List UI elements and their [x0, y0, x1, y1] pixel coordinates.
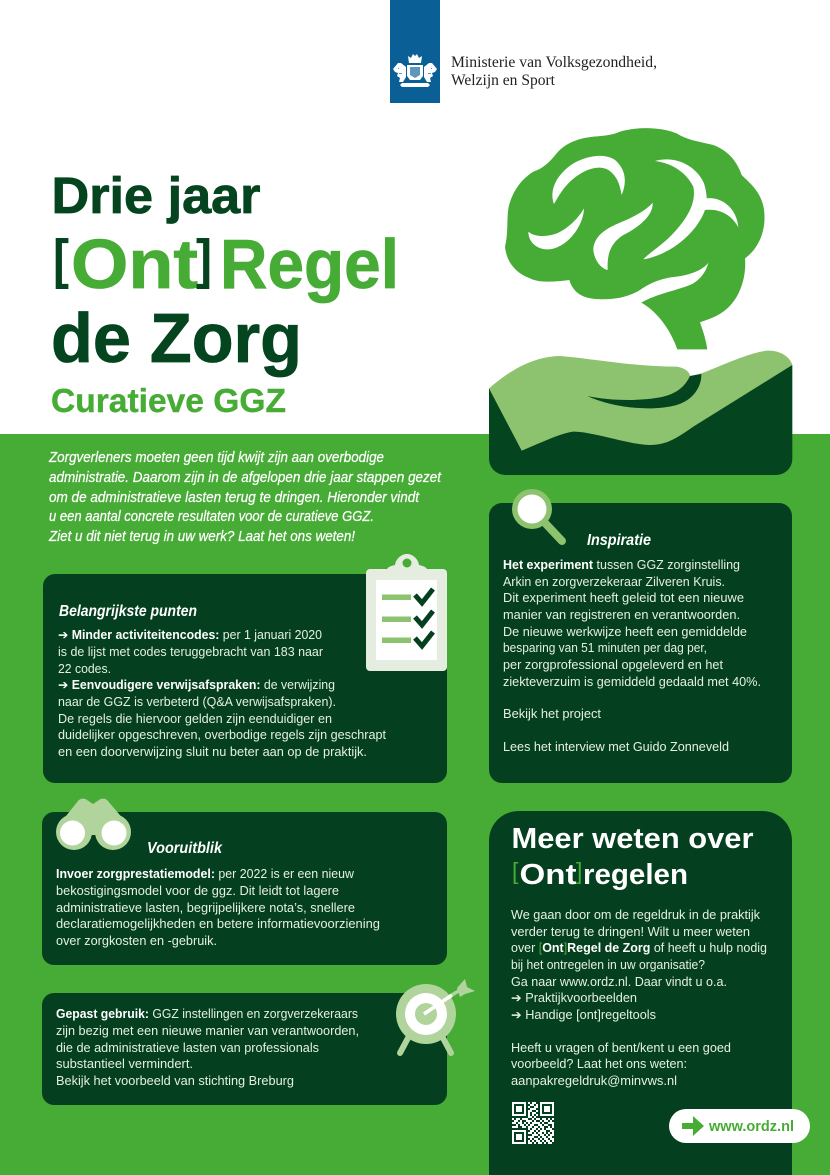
- body text: bekostigingsmodel voor de ggz. Dit leidt tot lagere: [56, 884, 339, 898]
- panel: vooruitblik: [42, 812, 447, 965]
- illustration: brain above a hand: [489, 128, 792, 475]
- heading: ]: [576, 858, 582, 884]
- url: www.ordz.nl: [708, 1118, 794, 1135]
- brain folds: [528, 156, 738, 270]
- panel background: [489, 811, 792, 1175]
- subtitle: Curatieve GGZ: [51, 382, 286, 419]
- body text: aanpakregeldruk@minvws.nl: [511, 1074, 677, 1088]
- panel background: [42, 812, 447, 965]
- body text: voorbeeld? Laat het ons weten:: [511, 1057, 687, 1071]
- hand base: [489, 365, 792, 475]
- intro text: u een aantal concrete resultaten voor de curatieve GGZ.: [49, 509, 374, 525]
- panel: belangrijkste punten: [43, 574, 447, 783]
- title line 2: [53, 225, 399, 303]
- ministry name line 2: Welzijn en Sport: [451, 72, 556, 89]
- body text: Bekijk het voorbeeld van stichting Breburg: [56, 1074, 294, 1088]
- panel: inspiratie: [489, 503, 792, 783]
- body text: Invoer zorgprestatiemodel: per 2022 is er een nieuw: [56, 867, 355, 881]
- website button: [669, 1109, 810, 1143]
- heading: Vooruitblik: [147, 840, 223, 857]
- body text: [503, 558, 761, 754]
- body text: declaratiemogelijkheden en betere informatievoorziening: [56, 917, 380, 931]
- body text: ➔ Handige [ont]regeltools: [511, 1008, 656, 1022]
- body text: over zorgkosten en -gebruik.: [56, 934, 217, 948]
- icon: target with dart: [396, 979, 475, 1053]
- intro text: Zorgverleners moeten geen tijd kwijt zijn aan overbodige: [48, 450, 384, 466]
- body text: zijn bezig met een nieuwe manier van verantwoorden,: [56, 1024, 359, 1038]
- heading: regelen: [583, 859, 688, 891]
- body text: is de lijst met codes teruggebracht van 183 naar: [58, 645, 323, 659]
- body text: Gepast gebruik: GGZ instellingen en zorgverzekeraars: [56, 1007, 358, 1021]
- heading: [: [512, 858, 519, 884]
- body text: administratieve lasten, begrijpelijkere nota’s, snellere: [56, 901, 355, 915]
- panel background: [43, 574, 447, 783]
- body text: duidelijker opgeschreven, overbodige regels zijn geschrapt: [58, 728, 386, 742]
- title line 2: Regel: [220, 225, 399, 303]
- title line 2: Ont: [71, 225, 198, 303]
- body text: ziekteverzuim is gemiddeld gedaald met 40%.: [503, 675, 761, 689]
- body text: ➔ Praktijkvoorbeelden: [511, 991, 637, 1005]
- body text: ➔ Eenvoudigere verwijsafspraken: de verwijzing: [58, 678, 335, 692]
- body text: De regels die hiervoor gelden zijn eenduidiger en: [58, 712, 332, 726]
- body text: De nieuwe werkwijze heeft een gemiddelde: [503, 625, 747, 639]
- body text: manier van registreren en verantwoorden.: [503, 608, 740, 622]
- heading: Meer weten over: [512, 823, 754, 855]
- body text: Bekijk het project: [503, 707, 602, 721]
- body text: Heeft u vragen of bent/kent u een goed: [511, 1041, 731, 1055]
- title line 2: [: [53, 228, 69, 290]
- heading: Inspiratie: [587, 532, 651, 549]
- icon: green arrow: [682, 1116, 704, 1136]
- heading: [512, 823, 754, 891]
- hand: [489, 351, 792, 451]
- title line 3: de Zorg: [51, 299, 302, 377]
- ministry name: Ministerie van Volksgezondheid,: [451, 54, 657, 71]
- panel: meer weten over ontregelen: [489, 811, 792, 1175]
- body text: Dit experiment heeft geleid tot een nieuwe: [503, 591, 744, 605]
- intro text: [48, 450, 442, 545]
- logo ribbon: [390, 0, 440, 103]
- body text: naar de GGZ is verbeterd (Q&A verwijsafspraken).: [58, 695, 336, 709]
- heading: Ont: [520, 859, 577, 891]
- body text: ➔ Minder activiteitencodes: per 1 januari 2020: [58, 628, 322, 642]
- body text: We gaan door om de regeldruk in de praktijk: [511, 908, 761, 922]
- body text: [511, 908, 767, 1088]
- body text: verder terug te dringen! Wilt u meer weten: [511, 925, 750, 939]
- intro text: om de administratieve lasten terug te dringen. Hieronder vindt: [49, 490, 420, 506]
- logo: Rijksoverheid emblem and ministry name: [390, 0, 657, 103]
- title line 2: ]: [196, 228, 212, 290]
- body text: besparing van 51 minuten per dag per,: [503, 641, 707, 655]
- heading: Belangrijkste punten: [59, 603, 197, 620]
- body text: bij het ontregelen in uw organisatie?: [511, 958, 705, 972]
- body text: en een doorverwijzing sluit nu beter aan op de praktijk.: [58, 745, 367, 759]
- intro text: administratie. Daarom zijn in de afgelopen drie jaar stappen gezet: [49, 470, 442, 486]
- icon: clipboard with checklist: [366, 554, 447, 671]
- body text: Lees het interview met Guido Zonneveld: [503, 740, 729, 754]
- panel background: [42, 993, 447, 1105]
- body text: [56, 867, 380, 948]
- body text: Arkin en zorgverzekeraar Zilveren Kruis.: [503, 575, 725, 589]
- body text: die de administratieve lasten van professionals: [56, 1041, 319, 1055]
- body text: 22 codes.: [58, 662, 111, 676]
- title: [51, 167, 399, 419]
- panel: gepast gebruik: [42, 993, 447, 1105]
- body text: substantieel vermindert.: [56, 1057, 193, 1071]
- title line 1: Drie jaar: [52, 167, 261, 224]
- hand fold: [587, 374, 701, 408]
- icon: binoculars: [56, 799, 131, 850]
- body text: [56, 1007, 359, 1088]
- body text: over [Ont]Regel de Zorg of heeft u hulp nodig: [511, 941, 767, 955]
- body text: [58, 628, 386, 759]
- QR code: [512, 1103, 554, 1143]
- icon: magnifying glass: [512, 489, 562, 541]
- body text: Het experiment tussen GGZ zorginstelling: [503, 558, 740, 572]
- brain: [505, 128, 765, 349]
- body text: Ga naar www.ordz.nl. Daar vindt u o.a.: [511, 975, 727, 989]
- icon: royal coat of arms: [393, 54, 437, 87]
- intro text: Ziet u dit niet terug in uw werk? Laat het ons weten!: [48, 529, 355, 545]
- panel background: [489, 503, 792, 783]
- body text: per zorgprofessional opgeleverd en het: [503, 658, 724, 672]
